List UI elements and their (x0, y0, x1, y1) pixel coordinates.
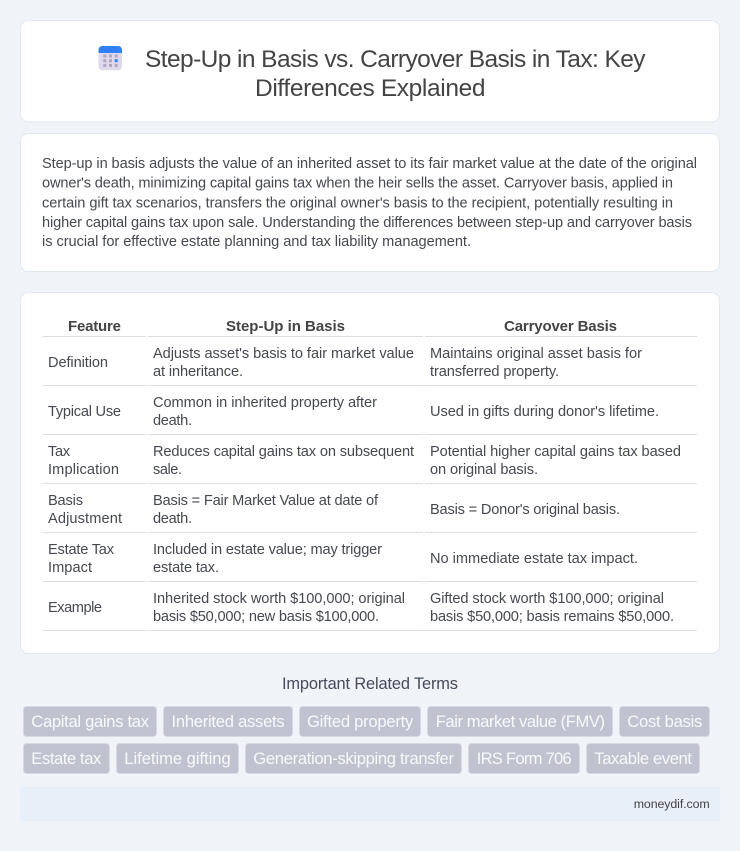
title (145, 46, 646, 102)
row: estate tax impact: Impact (48, 560, 92, 576)
row: typical use (43, 395, 697, 435)
intro paragraph: higher capital gains tax upon sale. Understanding the differences between step-up and carryover basis (42, 215, 692, 231)
tag: gifted property: Gifted property (307, 712, 414, 731)
tag: cost basis (620, 706, 710, 736)
row: basis adjustment: Basis = Donor's original basis. (430, 502, 620, 518)
tag: IRS form 706: IRS Form 706 (477, 749, 572, 768)
row: estate tax impact: Included in estate value; may trigger (153, 542, 382, 558)
tag: inherited assets (164, 706, 292, 736)
row: example: Inherited stock worth $100,000; original (153, 591, 405, 607)
intro paragraph (42, 156, 697, 250)
row: tax implication: on original basis. (430, 462, 538, 478)
row: definition: Maintains original asset basis for (430, 346, 642, 362)
row: example: basis $50,000; basis remains $50,000. (430, 609, 674, 625)
intro paragraph: is crucial for effective estate planning and tax liability management. (42, 234, 471, 250)
table header row: Step-Up in Basis (226, 318, 345, 335)
row: tax implication: Tax (48, 444, 71, 460)
row: basis adjustment (43, 493, 697, 533)
row: definition: Definition (48, 355, 108, 371)
tag list (24, 706, 710, 774)
tag: capital gains tax: Capital gains tax (31, 712, 150, 731)
panel: header (20, 20, 720, 122)
intro paragraph: Step-up in basis adjusts the value of an inherited asset to its fair market value at the date of the original (42, 156, 697, 172)
footer: moneydif.com (634, 797, 710, 811)
title: Differences Explained (255, 75, 486, 102)
tag: IRS form 706 (468, 744, 580, 774)
row: typical use: death. (153, 413, 192, 429)
tag: estate tax (24, 744, 110, 774)
row: tax implication: sale. (153, 462, 182, 478)
tag: capital gains tax (24, 706, 156, 736)
row: example: basis $50,000; new basis $100,000. (153, 609, 379, 625)
row: typical use: Used in gifts during donor's lifetime. (430, 404, 659, 420)
tag: lifetime gifting (116, 744, 238, 774)
tag: inherited assets: Inherited assets (172, 712, 285, 731)
row: typical use: Common in inherited property after (153, 395, 377, 411)
tag: fair market value (428, 706, 612, 736)
row: tax implication (43, 444, 697, 484)
row: definition: at inheritance. (153, 364, 243, 380)
icon: calendar (98, 46, 122, 70)
row: example: Gifted stock worth $100,000; original (430, 591, 664, 607)
row: estate tax impact (43, 542, 697, 582)
tag: generation-skipping transfer (246, 744, 462, 774)
tag: estate tax: Estate tax (31, 749, 102, 768)
row: tax implication: Potential higher capital gains tax based (430, 444, 681, 460)
tag: fair market value: Fair market value (FMV) (436, 712, 605, 731)
row: estate tax impact: estate tax. (153, 560, 219, 576)
row: definition (43, 346, 697, 386)
tag: taxable event: Taxable event (594, 749, 692, 768)
row: estate tax impact: No immediate estate tax impact. (430, 551, 638, 567)
tag: cost basis: Cost basis (627, 712, 702, 731)
row: example: Example (48, 600, 102, 616)
row: definition: transferred property. (430, 364, 559, 380)
heading: important related terms: Important Related Terms (282, 675, 458, 693)
tag: taxable event (586, 744, 700, 774)
row: tax implication: Reduces capital gains tax on subsequent (153, 444, 414, 460)
row: basis adjustment: death. (153, 511, 192, 527)
tag: lifetime gifting: Lifetime gifting (124, 749, 231, 768)
table header row: Carryover Basis (504, 318, 617, 335)
intro paragraph: owner's death, minimizing capital gains tax when the heir sells the asset. Carryover basis, applied in (42, 176, 673, 192)
tag: gifted property (300, 706, 420, 736)
row: tax implication: Implication (48, 462, 119, 478)
intro paragraph: certain gift tax scenarios, transfers the original owner's basis to the recipient, potentially resulting in (42, 196, 673, 212)
row: typical use: Typical Use (48, 404, 121, 420)
row: definition: Adjusts asset's basis to fair market value (153, 346, 414, 362)
row: basis adjustment: Basis = Fair Market Value at date of (153, 493, 379, 509)
tag: generation-skipping transfer: Generation-skipping transfer (253, 749, 454, 768)
table header row (43, 318, 697, 337)
row: basis adjustment: Adjustment (48, 511, 122, 527)
title: Step-Up in Basis vs. Carryover Basis in Tax: Key (145, 46, 646, 73)
row: example (43, 591, 697, 631)
panel: comparison table (20, 292, 720, 654)
table header row: Feature (68, 318, 121, 335)
footer (20, 787, 720, 821)
row: basis adjustment: Basis (48, 493, 83, 509)
row: estate tax impact: Estate Tax (48, 542, 115, 558)
panel: introduction (20, 134, 720, 272)
